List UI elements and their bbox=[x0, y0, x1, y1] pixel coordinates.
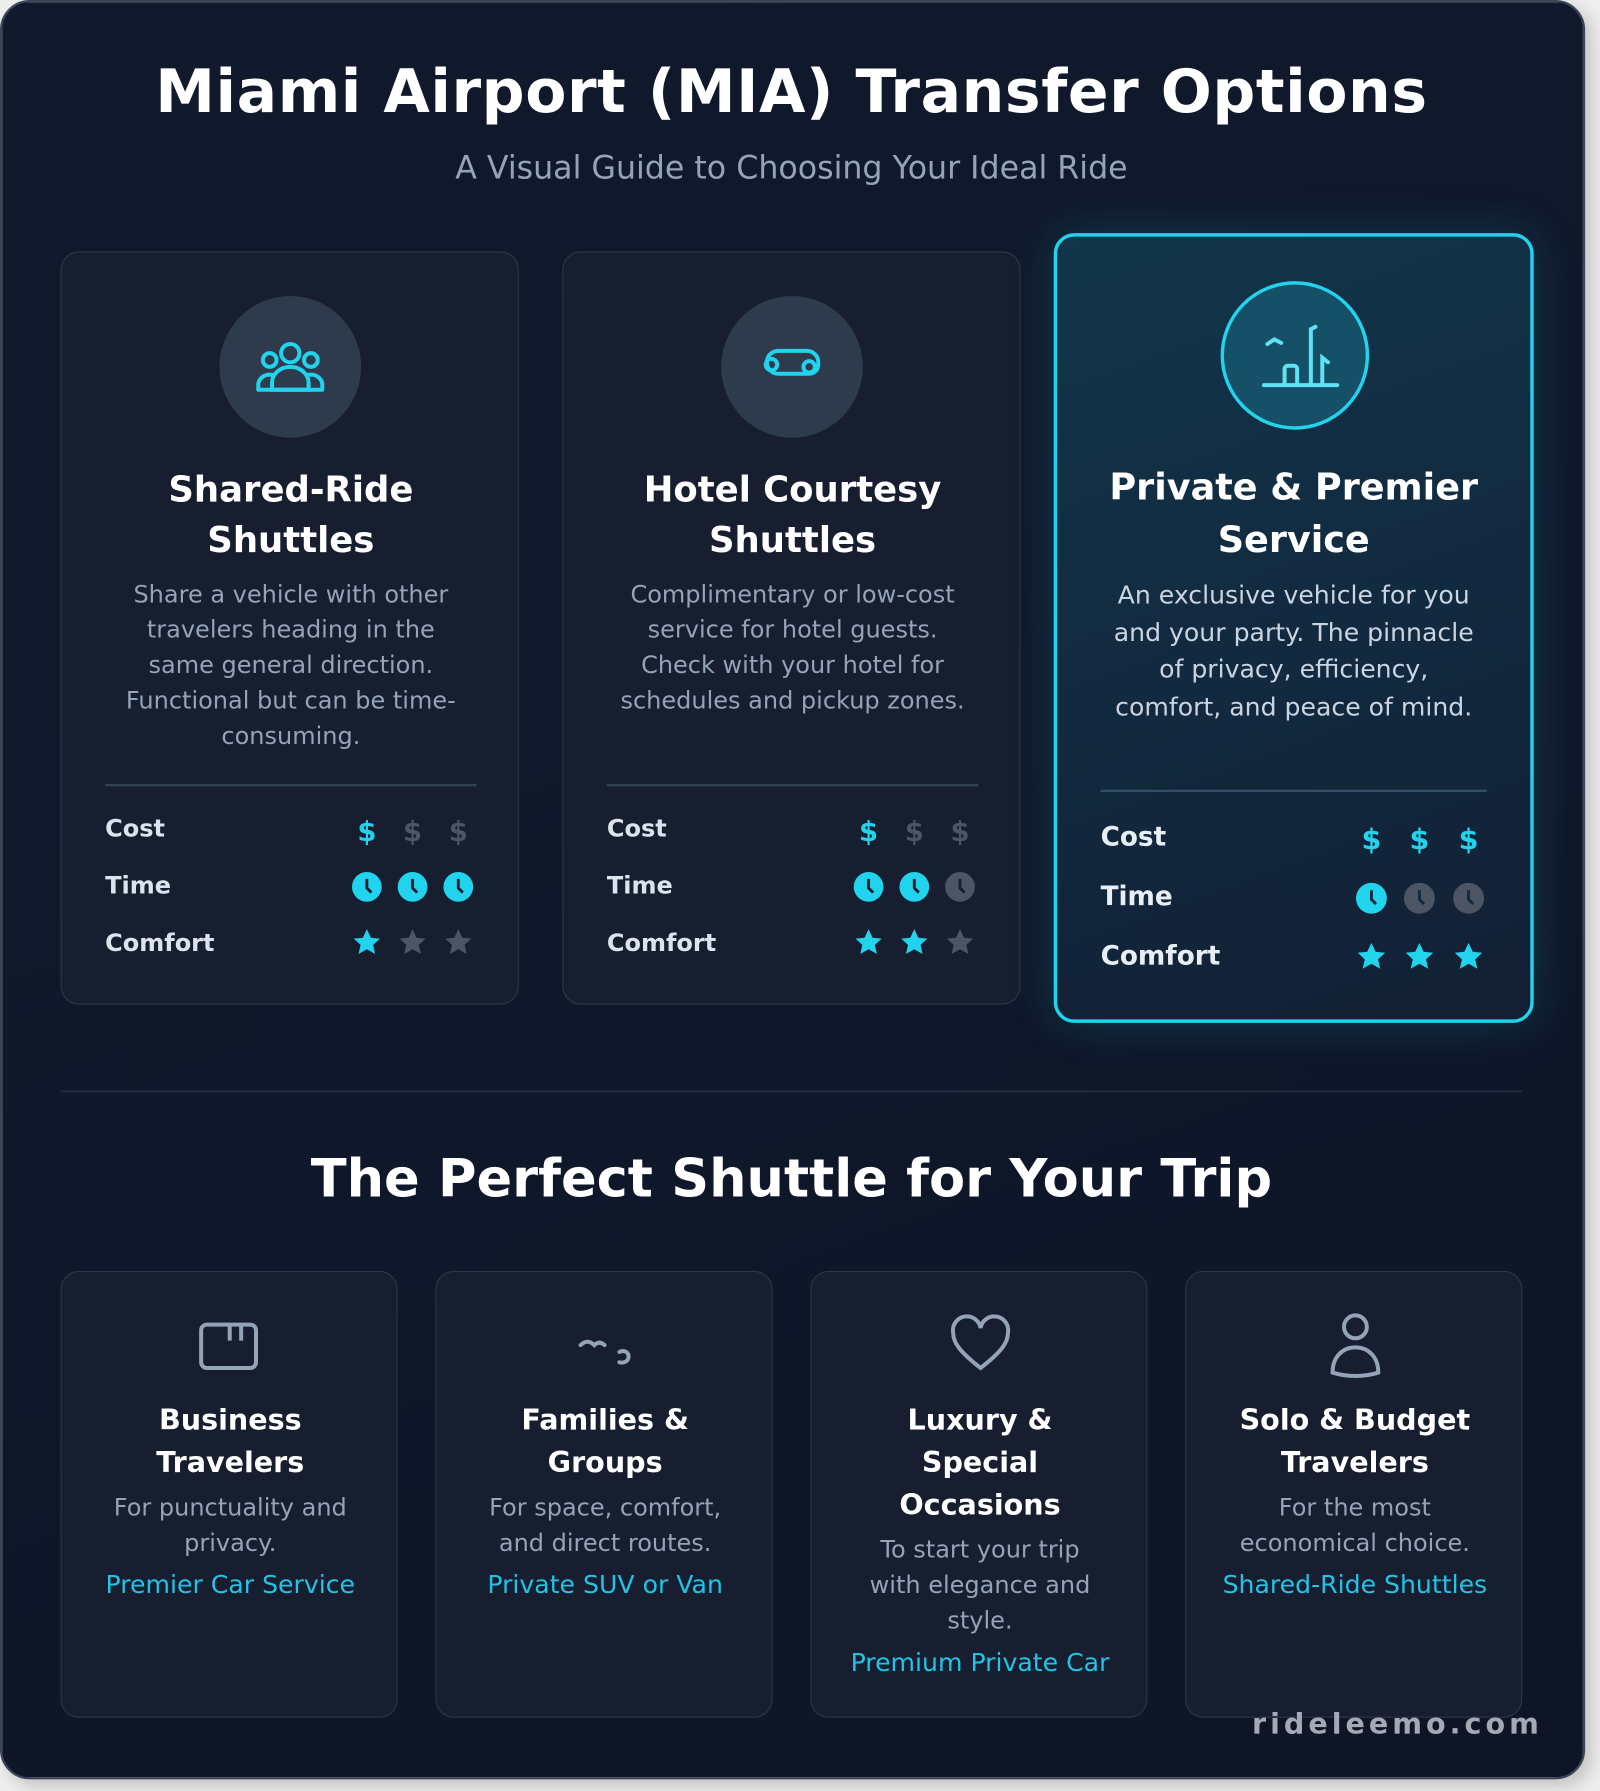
ratings: $ bbox=[449, 817, 468, 848]
subtitle: A Visual Guide to Choosing Your Ideal Ride bbox=[455, 149, 1128, 186]
description: Share a vehicle with other travelers heading in the same general direction. Functional but can be time-consuming. bbox=[126, 581, 456, 750]
watermark: rideleemo.com bbox=[1252, 1707, 1543, 1741]
ratings: Cost bbox=[607, 815, 667, 842]
text: Private SUV or Van bbox=[487, 1571, 723, 1600]
panel: luxury & special occasions bbox=[810, 1271, 1147, 1718]
ratings: $ bbox=[859, 817, 878, 848]
ratings: $ bbox=[1361, 822, 1381, 856]
text: Occasions bbox=[899, 1488, 1061, 1521]
ratings: Comfort bbox=[607, 929, 716, 957]
text: Shared-Ride Shuttles bbox=[1223, 1571, 1487, 1600]
text bbox=[1223, 1403, 1487, 1600]
ratings: Cost bbox=[105, 815, 165, 842]
description: Complimentary or low-cost service for hotel guests. Check with your hotel for schedules and pickup zones. bbox=[620, 581, 965, 714]
text: Premium Private Car bbox=[851, 1649, 1109, 1678]
text: For punctuality and privacy. bbox=[114, 1494, 347, 1557]
ratings: Cost bbox=[1101, 823, 1166, 853]
text: Travelers bbox=[1281, 1446, 1429, 1479]
ratings: Comfort bbox=[105, 929, 214, 957]
section heading: The Perfect Shuttle for Your Trip bbox=[311, 1147, 1272, 1209]
icon: group bbox=[219, 296, 361, 438]
ratings bbox=[1100, 822, 1484, 971]
text: Business bbox=[159, 1403, 302, 1437]
ratings: $ bbox=[905, 817, 924, 848]
text bbox=[487, 1403, 723, 1600]
ratings: $ bbox=[1409, 822, 1429, 856]
card title bbox=[1109, 465, 1478, 561]
card title bbox=[168, 470, 413, 561]
ratings: $ bbox=[1459, 822, 1479, 856]
card title bbox=[644, 470, 941, 561]
panel: shared-ride shuttles bbox=[61, 251, 519, 1005]
ratings: Time bbox=[607, 872, 673, 899]
card title: Shuttles bbox=[709, 520, 876, 561]
panel: hotel courtesy shuttles bbox=[562, 251, 1021, 1005]
text bbox=[106, 1403, 355, 1600]
text: Solo & Budget bbox=[1240, 1403, 1470, 1437]
icon: family bbox=[578, 1340, 631, 1365]
title: Miami Airport (MIA) Transfer Options bbox=[155, 57, 1428, 127]
ratings: $ bbox=[403, 817, 422, 848]
card title: Service bbox=[1218, 518, 1370, 561]
panel: solo & budget travelers bbox=[1185, 1271, 1522, 1718]
ratings: $ bbox=[950, 817, 970, 848]
ratings: Comfort bbox=[1101, 942, 1220, 971]
card title: Shared-Ride bbox=[168, 470, 413, 511]
description: An exclusive vehicle for you and your party. The pinnacle of privacy, efficiency, comfort, and peace of mind. bbox=[1114, 582, 1474, 722]
panel: private & premier service (highlighted) bbox=[1054, 233, 1534, 1023]
ratings: Time bbox=[1101, 882, 1173, 912]
text: Special bbox=[922, 1446, 1038, 1479]
ratings bbox=[607, 815, 975, 957]
card title: Shuttles bbox=[207, 520, 374, 561]
text: Travelers bbox=[156, 1446, 304, 1479]
ratings: Time bbox=[105, 872, 171, 899]
text: For space, comfort, and direct routes. bbox=[489, 1494, 721, 1557]
text: To start your trip with elegance and style. bbox=[870, 1536, 1090, 1634]
text: Groups bbox=[548, 1446, 663, 1479]
panel: business travelers bbox=[61, 1271, 398, 1718]
icon: briefcase bbox=[199, 1322, 258, 1370]
text: Families & bbox=[521, 1403, 689, 1437]
icon: premier bbox=[1221, 281, 1369, 430]
icon: person bbox=[1330, 1313, 1380, 1378]
icon: shuttle bbox=[721, 296, 863, 438]
ratings: $ bbox=[357, 817, 376, 848]
text bbox=[851, 1403, 1110, 1678]
card title: Private & Premier bbox=[1109, 465, 1478, 509]
panel: families & groups bbox=[435, 1271, 773, 1718]
card title: Hotel Courtesy bbox=[644, 470, 941, 511]
text: Premier Car Service bbox=[106, 1571, 355, 1600]
ratings bbox=[105, 815, 474, 957]
text: For the most economical choice. bbox=[1240, 1494, 1470, 1557]
text: Luxury & bbox=[908, 1403, 1052, 1437]
icon: heart bbox=[951, 1314, 1010, 1370]
